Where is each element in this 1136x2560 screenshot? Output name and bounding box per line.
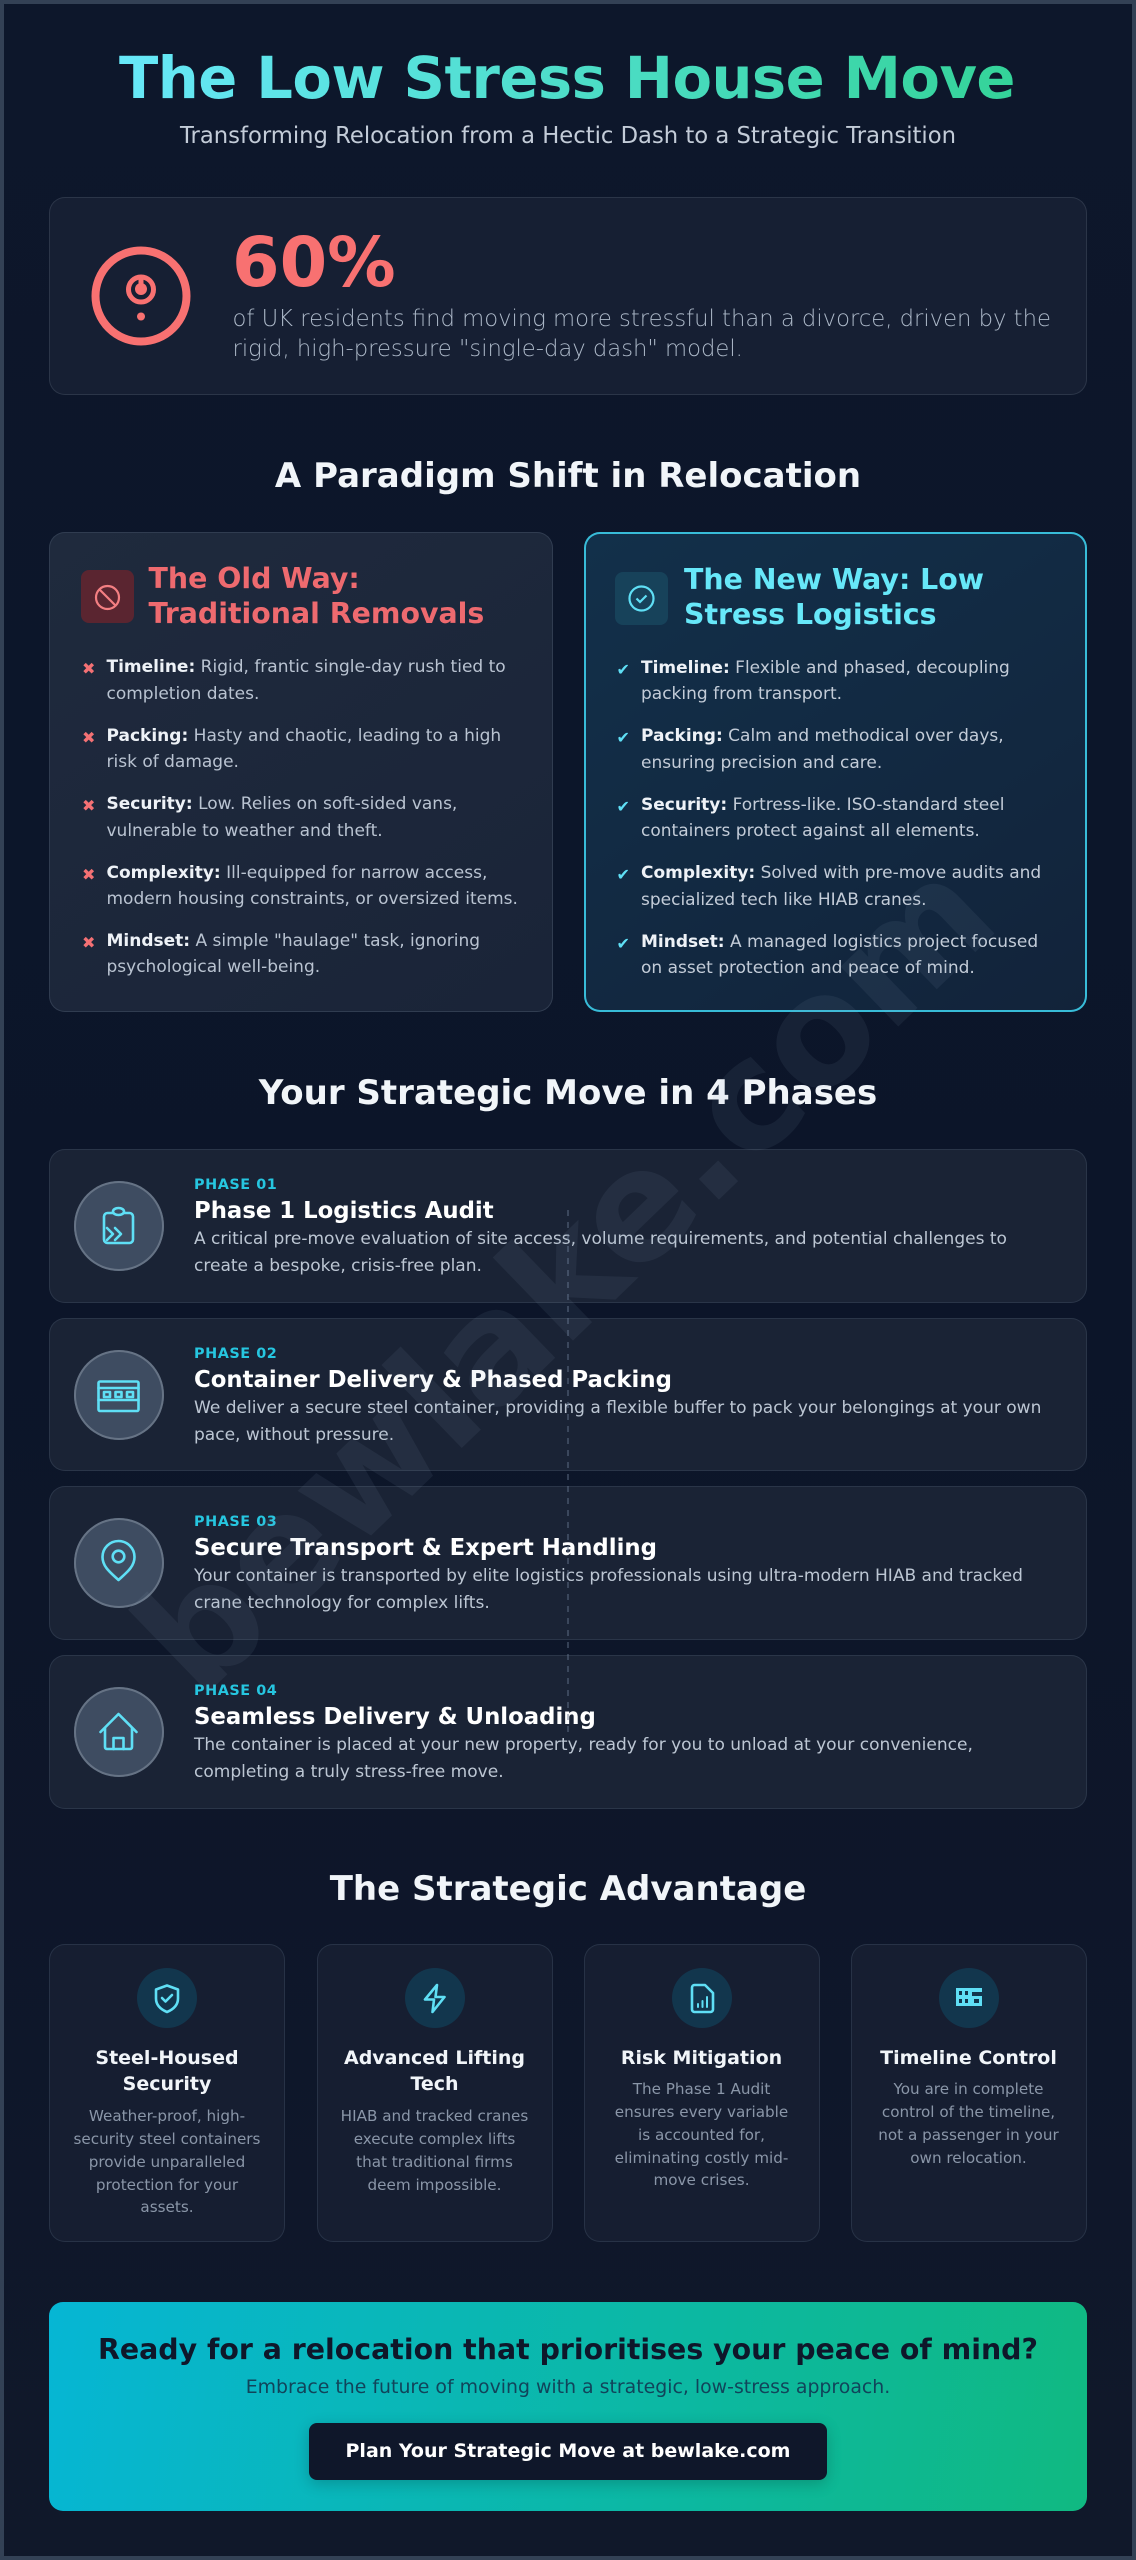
new way heading: The New Way: Low bbox=[684, 563, 984, 596]
new way list: Mindset: A managed logistics project focused bbox=[641, 932, 1038, 952]
phase title: Secure Transport & Expert Handling bbox=[194, 1535, 657, 1561]
phase description bbox=[194, 1566, 1023, 1613]
panel: phase 1 bbox=[49, 1149, 1087, 1302]
statistic description: rigid, high-pressure "single-day dash" model. bbox=[232, 336, 743, 362]
old way list: Complexity: Ill-equipped for narrow access, bbox=[106, 863, 487, 883]
phase description bbox=[194, 1229, 1007, 1276]
phase description: pace, without pressure. bbox=[194, 1425, 394, 1445]
old way list: ✖ bbox=[82, 796, 95, 815]
card text: move crises. bbox=[653, 2171, 750, 2189]
statistic number: 60% bbox=[232, 224, 396, 302]
new way heading bbox=[684, 563, 984, 630]
old way list bbox=[82, 657, 518, 977]
card text: provide unparalleled bbox=[89, 2153, 245, 2171]
cta heading: Ready for a relocation that prioritises your peace of mind? bbox=[98, 2333, 1038, 2366]
old way list: ✖ bbox=[82, 728, 95, 747]
new way list: Packing: Calm and methodical over days, bbox=[641, 726, 1004, 746]
icon: prohibited bbox=[80, 570, 134, 623]
new way list bbox=[616, 658, 1041, 978]
card title bbox=[95, 2046, 239, 2095]
old way list: completion dates. bbox=[106, 684, 259, 704]
panel: phase 3 bbox=[49, 1486, 1087, 1640]
card text: You are in complete bbox=[893, 2080, 1044, 2098]
phase label: PHASE 04 bbox=[194, 1683, 277, 1699]
heading: paradigm shift: A Paradigm Shift in Relocation bbox=[275, 456, 861, 496]
new way list: packing from transport. bbox=[641, 684, 842, 704]
phase description: completing a truly stress-free move. bbox=[194, 1762, 504, 1782]
panel: risk mitigation bbox=[584, 1944, 820, 2242]
new way list: on asset protection and peace of mind. bbox=[641, 958, 975, 978]
panel: key statistic bbox=[49, 197, 1087, 395]
heading: four phases: Your Strategic Move in 4 Phases bbox=[259, 1073, 877, 1113]
card text bbox=[74, 2107, 260, 2216]
phase description bbox=[194, 1735, 973, 1782]
new way list: ✔ bbox=[616, 660, 630, 679]
card text: is accounted for, bbox=[638, 2126, 765, 2144]
card title: Risk Mitigation bbox=[621, 2046, 782, 2068]
old way list: modern housing constraints, or oversized items. bbox=[106, 889, 518, 909]
card text bbox=[615, 2080, 788, 2189]
card text: security steel containers bbox=[74, 2130, 260, 2148]
statistic description: of UK residents find moving more stressful than a divorce, driven by the bbox=[232, 306, 1051, 332]
old way heading: The Old Way: bbox=[148, 562, 360, 595]
icon: document chart bbox=[672, 1968, 732, 2028]
card text: ensures every variable bbox=[615, 2103, 788, 2121]
icon: stress gauge bbox=[92, 246, 190, 346]
new way list: ✔ bbox=[616, 797, 630, 816]
card text: own relocation. bbox=[910, 2148, 1027, 2166]
phase description bbox=[194, 1398, 1041, 1445]
card text: assets. bbox=[140, 2198, 194, 2216]
old way heading: Traditional Removals bbox=[148, 596, 484, 630]
card text: Weather-proof, high- bbox=[89, 2107, 245, 2125]
cta button bbox=[309, 2423, 827, 2480]
panel: steel-housed security bbox=[49, 1944, 285, 2242]
card text: HIAB and tracked cranes bbox=[341, 2107, 528, 2125]
new way heading: Stress Logistics bbox=[684, 598, 937, 630]
title: The Low Stress House Move bbox=[119, 45, 1015, 112]
card text: eliminating costly mid- bbox=[615, 2148, 788, 2166]
icon: shield bbox=[137, 1968, 197, 2028]
panel: advanced lifting tech bbox=[316, 1944, 552, 2242]
new way list: Timeline: Flexible and phased, decoupling bbox=[641, 658, 1010, 678]
card text: not a passenger in your bbox=[878, 2126, 1059, 2144]
new way list: specialized tech like HIAB cranes. bbox=[641, 890, 927, 910]
card text: deem impossible. bbox=[368, 2176, 501, 2194]
icon: timeline grid bbox=[938, 1968, 998, 2028]
new way list: containers protect against all elements. bbox=[641, 821, 980, 841]
old way list: Packing: Hasty and chaotic, leading to a high bbox=[106, 726, 501, 746]
dashed connector between phases bbox=[567, 1210, 569, 1732]
card title: Steel-Housed bbox=[95, 2046, 239, 2068]
phase description: crane technology for complex lifts. bbox=[194, 1593, 490, 1613]
phase description: create a bespoke, crisis-free plan. bbox=[194, 1256, 482, 1276]
phase title: Container Delivery & Phased Packing bbox=[194, 1367, 672, 1393]
card text: protection for your bbox=[96, 2176, 238, 2194]
new way list: ✔ bbox=[616, 934, 630, 953]
new way list: Security: Fortress-like. ISO-standard steel bbox=[641, 795, 1004, 815]
phase label: PHASE 02 bbox=[194, 1346, 277, 1362]
card text: execute complex lifts bbox=[354, 2130, 515, 2148]
new way list: ✔ bbox=[616, 865, 630, 884]
card title bbox=[344, 2046, 525, 2095]
statistic description bbox=[232, 306, 1051, 362]
watermark: bewlake.com bbox=[101, 824, 1028, 1728]
icon: clipboard bbox=[74, 1181, 164, 1271]
card text: The Phase 1 Audit bbox=[633, 2080, 770, 2098]
card text: control of the timeline, bbox=[882, 2103, 1055, 2121]
phase title: Seamless Delivery & Unloading bbox=[194, 1704, 596, 1730]
old way list: Timeline: Rigid, frantic single-day rush tied to bbox=[106, 657, 506, 677]
old way list: risk of damage. bbox=[106, 752, 239, 772]
panel: phase 4 bbox=[49, 1655, 1087, 1808]
phase title: Phase 1 Logistics Audit bbox=[194, 1198, 494, 1224]
cta subtext: Embrace the future of moving with a strategic, low-stress approach. bbox=[246, 2376, 890, 2398]
panel: timeline control bbox=[850, 1944, 1086, 2242]
panel: the new way bbox=[584, 532, 1087, 1012]
phase label: PHASE 03 bbox=[194, 1514, 277, 1530]
old way list: Mindset: A simple "haulage" task, ignoring bbox=[106, 931, 480, 951]
card title: Tech bbox=[410, 2073, 459, 2095]
new way list: Complexity: Solved with pre-move audits and bbox=[641, 863, 1041, 883]
heading: strategic advantage: The Strategic Advantage bbox=[330, 1868, 806, 1908]
icon: shipping container bbox=[74, 1350, 164, 1440]
phase description: Your container is transported by elite logistics professionals using ultra-modern HIAB and tracked bbox=[194, 1566, 1023, 1586]
call to action panel bbox=[49, 2302, 1087, 2511]
panel: phase 2 bbox=[49, 1318, 1087, 1471]
card text: that traditional firms bbox=[356, 2153, 513, 2171]
panel: the old way bbox=[49, 532, 553, 1012]
icon: house bbox=[74, 1687, 164, 1777]
card title: Advanced Lifting bbox=[344, 2046, 525, 2068]
icon: lightning bolt bbox=[404, 1968, 464, 2028]
old way list: ✖ bbox=[82, 933, 95, 952]
old way list: vulnerable to weather and theft. bbox=[106, 821, 383, 841]
new way list: ensuring precision and care. bbox=[641, 753, 882, 773]
new way list: ✔ bbox=[616, 728, 630, 747]
old way list: Security: Low. Relies on soft-sided vans, bbox=[106, 794, 457, 814]
icon: check circle bbox=[615, 572, 668, 625]
card title: Security bbox=[123, 2073, 211, 2095]
old way heading bbox=[148, 562, 484, 630]
phase description: The container is placed at your new property, ready for you to unload at your convenience, bbox=[194, 1735, 973, 1755]
phase description: We deliver a secure steel container, providing a flexible buffer to pack your belongings at your own bbox=[194, 1398, 1041, 1418]
phase label: PHASE 01 bbox=[194, 1177, 277, 1193]
old way list: psychological well-being. bbox=[106, 957, 320, 977]
card text bbox=[341, 2107, 528, 2194]
old way list: ✖ bbox=[82, 659, 95, 678]
subtitle: Transforming Relocation from a Hectic Dash to a Strategic Transition bbox=[180, 123, 956, 149]
icon: location pin bbox=[74, 1518, 164, 1608]
card title: Timeline Control bbox=[880, 2046, 1057, 2068]
phase description: A critical pre-move evaluation of site access, volume requirements, and potential challenges to bbox=[194, 1229, 1007, 1249]
cta button: Plan Your Strategic Move at bewlake.com bbox=[346, 2440, 790, 2462]
old way list: ✖ bbox=[82, 865, 95, 884]
card text bbox=[878, 2080, 1059, 2166]
